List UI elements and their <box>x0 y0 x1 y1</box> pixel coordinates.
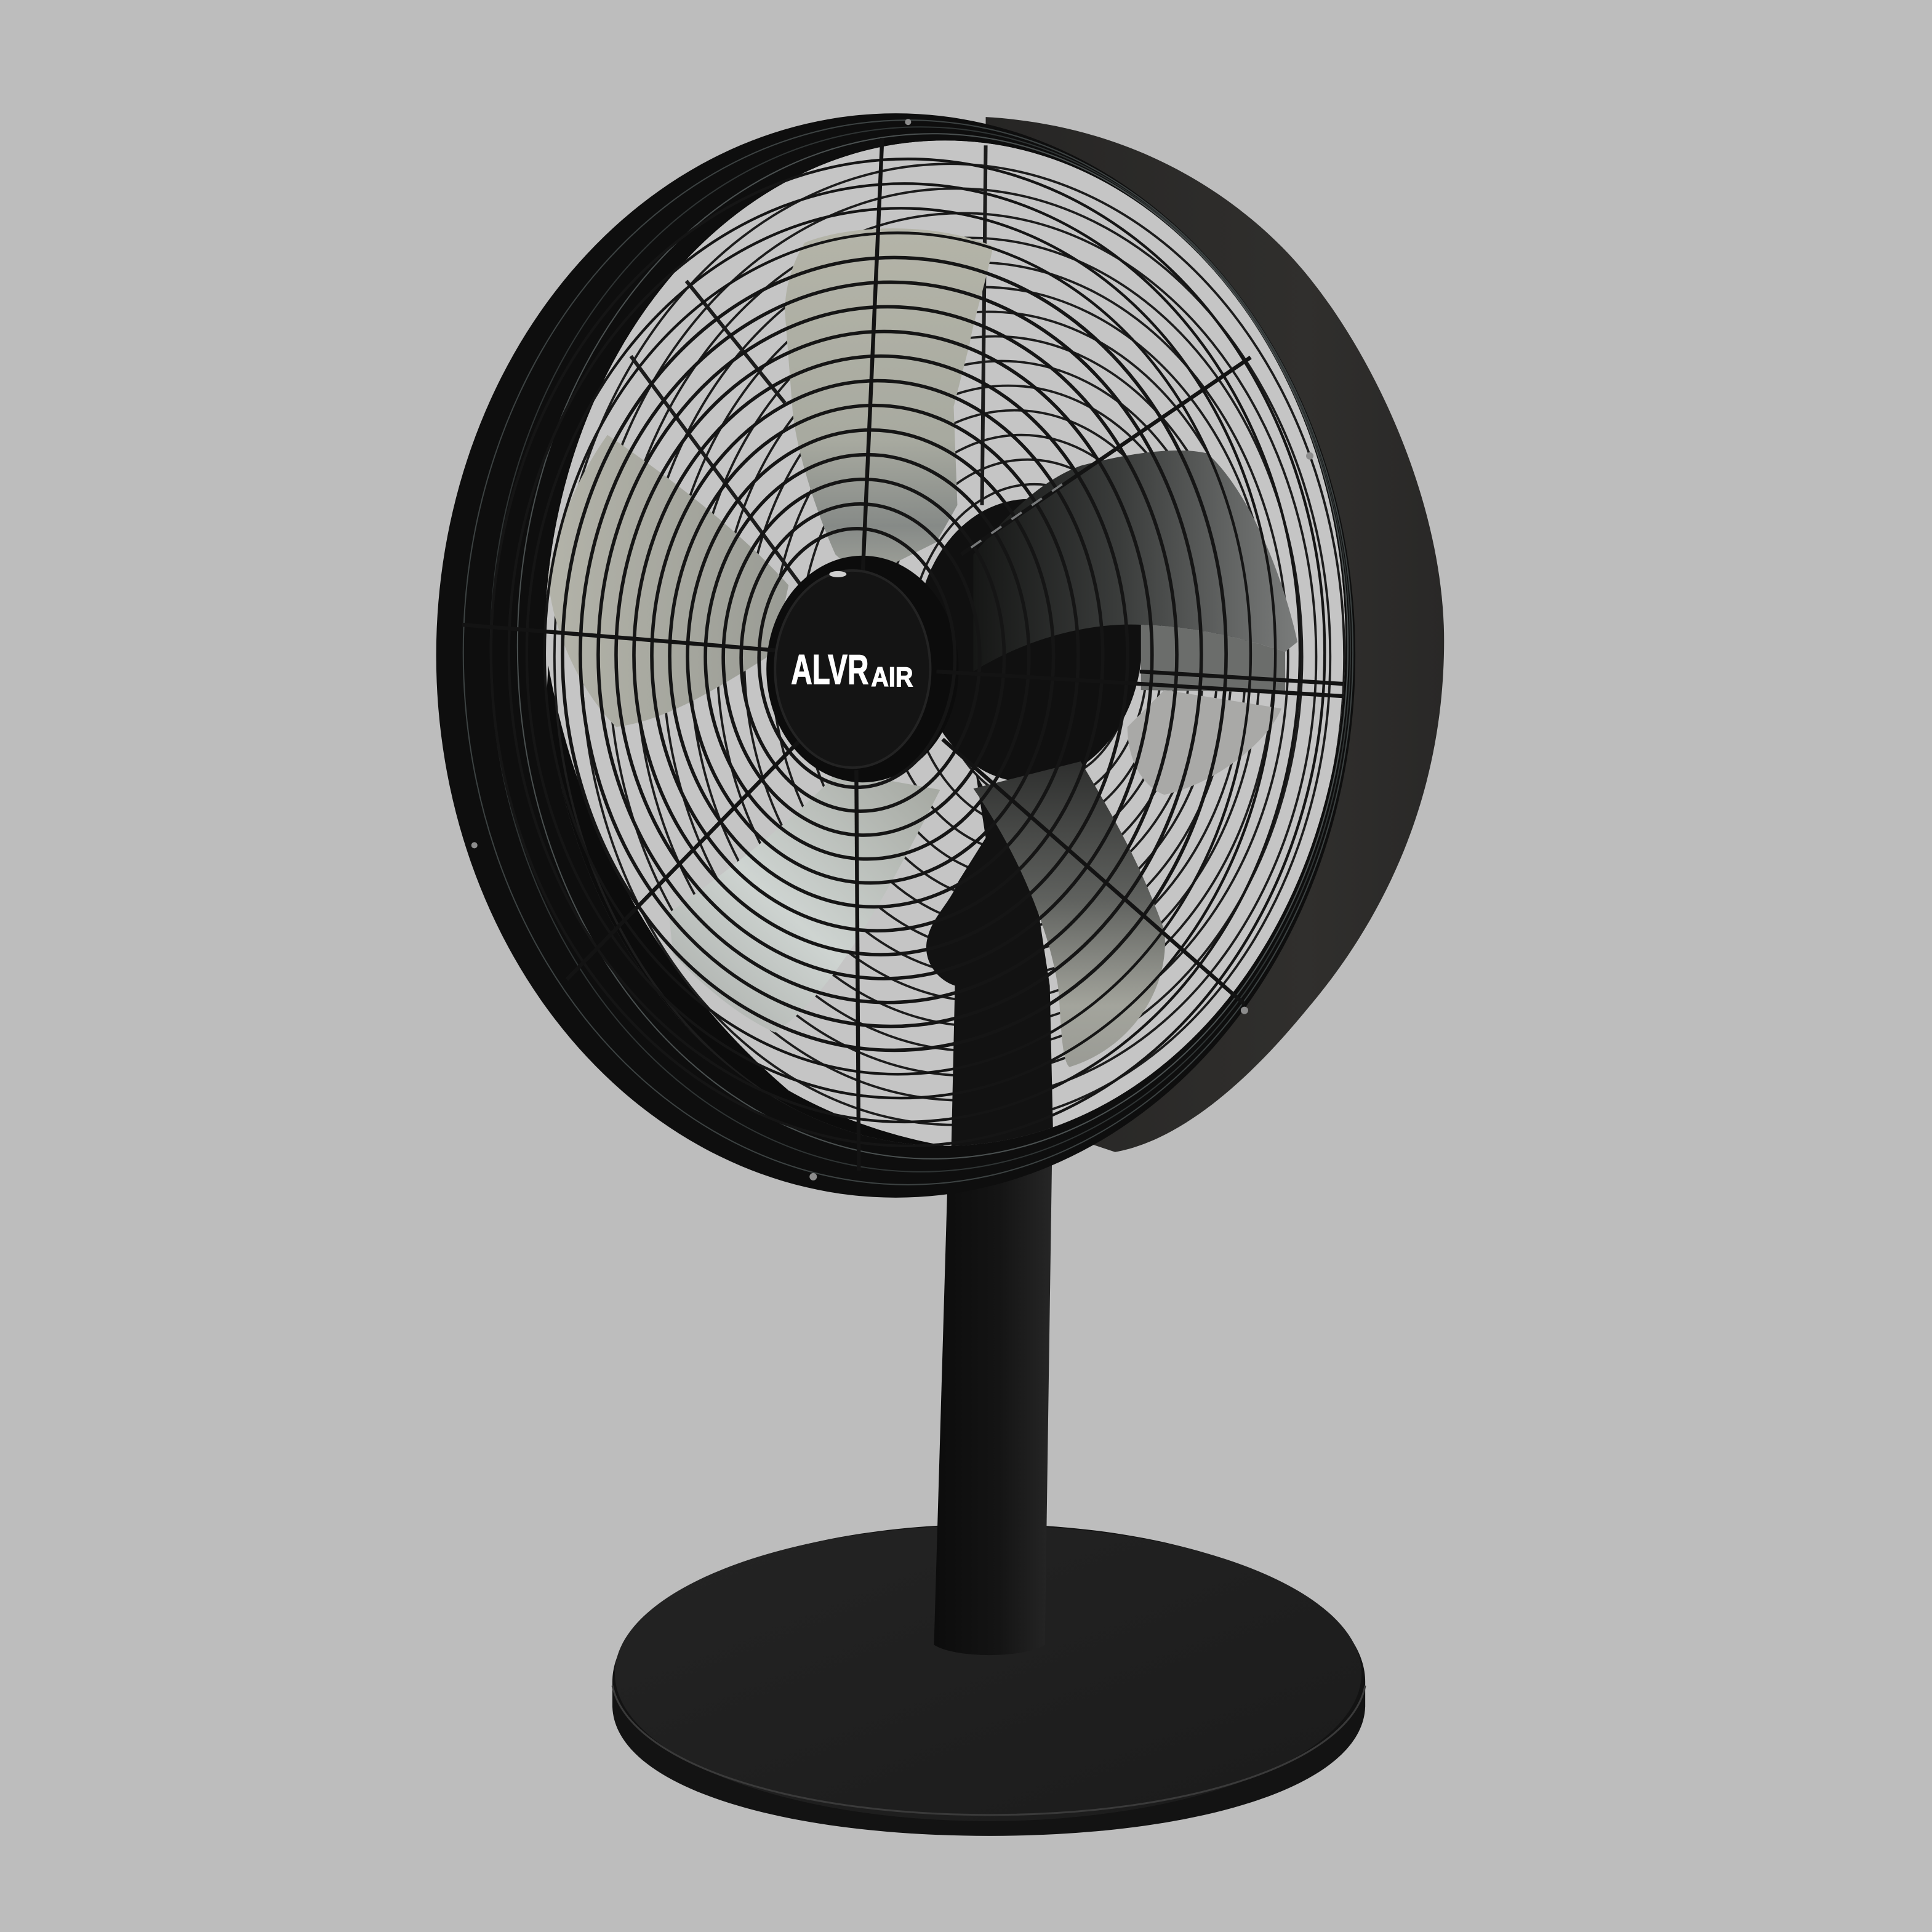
rim shadow: lower left <box>547 665 945 1146</box>
blade: right, rear band <box>1141 625 1285 692</box>
grille opening <box>530 140 1345 1183</box>
round base <box>612 1524 1365 1836</box>
motor housing <box>915 499 1142 782</box>
guard spokes <box>462 138 1343 1171</box>
blade: top <box>785 228 993 579</box>
product image: table fan <box>436 113 1444 1836</box>
pole <box>934 1140 1052 1655</box>
front guard wires <box>491 159 1325 1146</box>
front rim <box>436 113 1355 1198</box>
fan rear shell <box>986 117 1444 1152</box>
blade: right, lower reflection <box>1128 690 1281 795</box>
blade: left <box>548 435 788 727</box>
spoke highlight on motor <box>961 484 1062 555</box>
rim screws <box>471 119 1313 1180</box>
rear guard wires <box>555 145 1344 1150</box>
blade: lower left <box>669 771 940 1033</box>
hub cap <box>775 571 930 768</box>
logo: AIR <box>871 662 913 692</box>
stem seen through grille <box>926 774 1054 1152</box>
blade: lower right <box>974 761 1165 1067</box>
hub shadow <box>766 556 958 782</box>
blade: right <box>974 451 1297 671</box>
logo: ALVR <box>791 646 868 693</box>
